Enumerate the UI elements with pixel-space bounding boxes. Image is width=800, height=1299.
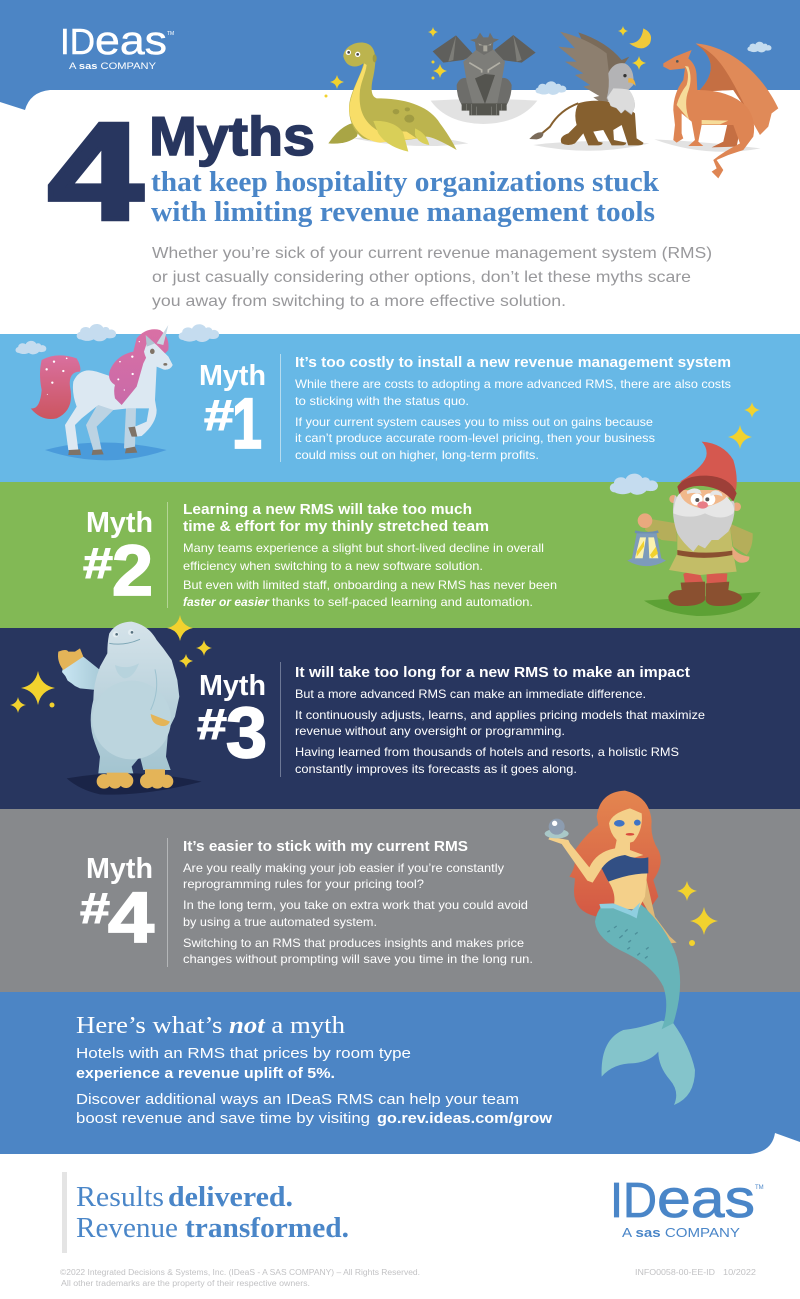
myth 4 body: by using a true automated system. bbox=[183, 916, 377, 929]
logo: IDeaS footer: ID bbox=[610, 1174, 657, 1228]
myth 4 body: Switching to an RMS that produces insights and makes price bbox=[183, 937, 524, 950]
logo: IDeaS top: ID bbox=[60, 21, 95, 62]
tagline: Revenue bbox=[76, 1212, 178, 1244]
logo: IDeaS top bbox=[60, 19, 174, 72]
label: Myth #2: Myth bbox=[86, 507, 153, 539]
label: Myth #1: # bbox=[204, 391, 234, 440]
header band bbox=[0, 0, 800, 110]
document code bbox=[635, 1268, 757, 1277]
myth 4 body: In the long term, you take on extra work that you could avoid bbox=[183, 899, 528, 912]
numeral 4: 4 bbox=[48, 95, 143, 249]
panel: myth 2 bbox=[0, 482, 800, 628]
myth 3 body: But a more advanced RMS can make an immediate difference. bbox=[295, 688, 646, 701]
logo: IDeaS footer: A sas COMPANY bbox=[622, 1225, 740, 1240]
myth 2 title bbox=[183, 502, 489, 535]
document code: 10/2022 bbox=[723, 1268, 757, 1277]
intro paragraph: or just casually considering other options, don’t let these myths scare bbox=[152, 269, 691, 286]
myth 2 body: But even with limited staff, onboarding a new RMS has never been bbox=[183, 579, 557, 592]
myth 1 body: While there are costs to adopting a more advanced RMS, there are also costs bbox=[295, 378, 731, 391]
myth 3 body: revenue without any oversight or programming. bbox=[295, 725, 565, 738]
label: Myth #1: 1 bbox=[232, 385, 262, 464]
icon: crescent moon bbox=[629, 28, 651, 48]
creature: yeti bbox=[58, 622, 202, 795]
myth 3 body: constantly improves its forecasts as it goes along. bbox=[295, 763, 577, 776]
myth 3 body: Having learned from thousands of hotels and resorts, a holistic RMS bbox=[295, 746, 679, 759]
copyright bbox=[60, 1268, 420, 1288]
panel: myth 4 bbox=[0, 809, 800, 992]
creature: sea monster bbox=[328, 42, 468, 152]
myth 3 body bbox=[295, 688, 705, 776]
label: Myth #4: 4 bbox=[108, 879, 155, 958]
myth 3 title: It will take too long for a new RMS to make an impact bbox=[295, 665, 690, 681]
copyright: All other trademarks are the property of their respective owners. bbox=[61, 1279, 310, 1288]
not a myth heading: Here’s what’s not a myth bbox=[76, 1013, 345, 1039]
myth 2 body bbox=[183, 542, 557, 609]
creature: unicorn bbox=[31, 325, 173, 460]
myth 1 body: could miss out on higher, long-term profits. bbox=[295, 449, 539, 462]
document code: INFO0058-00-EE-ID bbox=[635, 1268, 715, 1277]
not a myth body bbox=[76, 1045, 552, 1127]
subheading bbox=[151, 167, 659, 228]
logo: IDeaS footer bbox=[610, 1169, 764, 1240]
label: Myth #3: # bbox=[197, 700, 227, 749]
not a myth body: experience a revenue uplift of 5%. bbox=[76, 1065, 335, 1082]
label: Myth #4 bbox=[80, 853, 155, 958]
subheading: that keep hospitality organizations stuck bbox=[151, 167, 659, 198]
tagline bbox=[76, 1181, 349, 1244]
myth 2 body: thanks to self-paced learning and automation. bbox=[272, 596, 533, 609]
intro paragraph: Whether you’re sick of your current revenue management system (RMS) bbox=[152, 245, 712, 262]
label: Myth #3: Myth bbox=[199, 670, 266, 702]
myth 2 title: Learning a new RMS will take too much bbox=[183, 502, 472, 518]
creature: gnome bbox=[627, 442, 761, 616]
myth 1 title: It’s too costly to install a new revenue management system bbox=[295, 355, 731, 371]
icon: clouds myth 1 bbox=[16, 324, 219, 354]
not a myth body: Hotels with an RMS that prices by room type bbox=[76, 1045, 411, 1062]
panel: myth 1 bbox=[0, 334, 800, 482]
heading: Myths: Myths bbox=[149, 105, 315, 167]
label: Myth #3: 3 bbox=[226, 694, 267, 773]
tagline: delivered. bbox=[168, 1181, 293, 1213]
icon: clouds header bbox=[536, 42, 771, 95]
creature: mermaid bbox=[545, 791, 695, 1105]
intro paragraph bbox=[152, 245, 712, 310]
tagline: transformed. bbox=[185, 1212, 349, 1244]
myth 2 title: time & effort for my thinly stretched team bbox=[183, 519, 489, 535]
label: Myth #4: Myth bbox=[86, 853, 153, 885]
icon: sparkles and cloud near gnome bbox=[610, 402, 760, 495]
myth 1 body: If your current system causes you to miss out on gains because bbox=[295, 416, 653, 429]
creature: dragon bbox=[654, 43, 778, 178]
icon: sparkles near mermaid bbox=[677, 881, 718, 946]
not a myth body: go.rev.ideas.com/grow bbox=[377, 1110, 552, 1127]
label: Myth #2: 2 bbox=[112, 532, 153, 611]
creature: gargoyle bbox=[431, 33, 537, 124]
label: Myth #2: # bbox=[83, 539, 113, 588]
not a myth body: Discover additional ways an IDeaS RMS can help your team bbox=[76, 1091, 519, 1108]
myth 4 body: changes without prompting will save you time in the long run. bbox=[183, 953, 533, 966]
logo: IDeaS top: TM bbox=[167, 31, 174, 37]
myth 1 body: to sticking with the status quo. bbox=[295, 395, 469, 408]
tagline: Results bbox=[76, 1181, 164, 1213]
myth 2 body: efficiency when switching to a new software solution. bbox=[183, 560, 483, 573]
myth 4 title: It’s easier to stick with my current RMS bbox=[183, 839, 468, 855]
intro paragraph: you away from switching to a more effective solution. bbox=[152, 293, 566, 310]
icon: sparkles header bbox=[324, 26, 646, 98]
icon: sparkles near yeti bbox=[10, 615, 212, 713]
subheading: with limiting revenue management tools bbox=[151, 197, 655, 228]
panel: myth 3 bbox=[0, 628, 800, 809]
label: Myth #4: # bbox=[80, 884, 110, 933]
label: Myth #3 bbox=[197, 670, 267, 773]
logo: IDeaS footer: TM bbox=[755, 1185, 764, 1191]
myth 3 body: It continuously adjusts, learns, and applies pricing models that maximize bbox=[295, 709, 705, 722]
myth 2 body: Many teams experience a slight but short-lived decline in overall bbox=[183, 542, 544, 555]
myth 4 body: Are you really making your job easier if you’re constantly bbox=[183, 862, 504, 875]
label: Myth #2 bbox=[83, 507, 153, 611]
myth 1 body: it can’t produce accurate room-level pricing, then your business bbox=[295, 432, 655, 445]
tagline bracket bbox=[62, 1172, 67, 1253]
myth 4 body bbox=[183, 862, 533, 966]
label: Myth #1: Myth bbox=[199, 360, 266, 392]
panel: not a myth bbox=[0, 992, 800, 1154]
myth 1 body bbox=[295, 378, 731, 462]
myth 4 body: reprogramming rules for your pricing tool? bbox=[183, 878, 425, 891]
logo: IDeaS top: eas bbox=[95, 19, 167, 63]
copyright: ©2022 Integrated Decisions & Systems, Inc. (IDeaS - A SAS COMPANY) – All Rights Reserved. bbox=[60, 1268, 420, 1277]
logo: IDeaS top: A sas COMPANY bbox=[69, 61, 157, 72]
not a myth body: boost revenue and save time by visiting bbox=[76, 1110, 370, 1127]
logo: IDeaS footer: eas bbox=[657, 1169, 755, 1229]
creature: griffin bbox=[529, 32, 649, 151]
label: Myth #1 bbox=[199, 360, 266, 464]
myth 2 body: faster or easier bbox=[183, 596, 271, 609]
